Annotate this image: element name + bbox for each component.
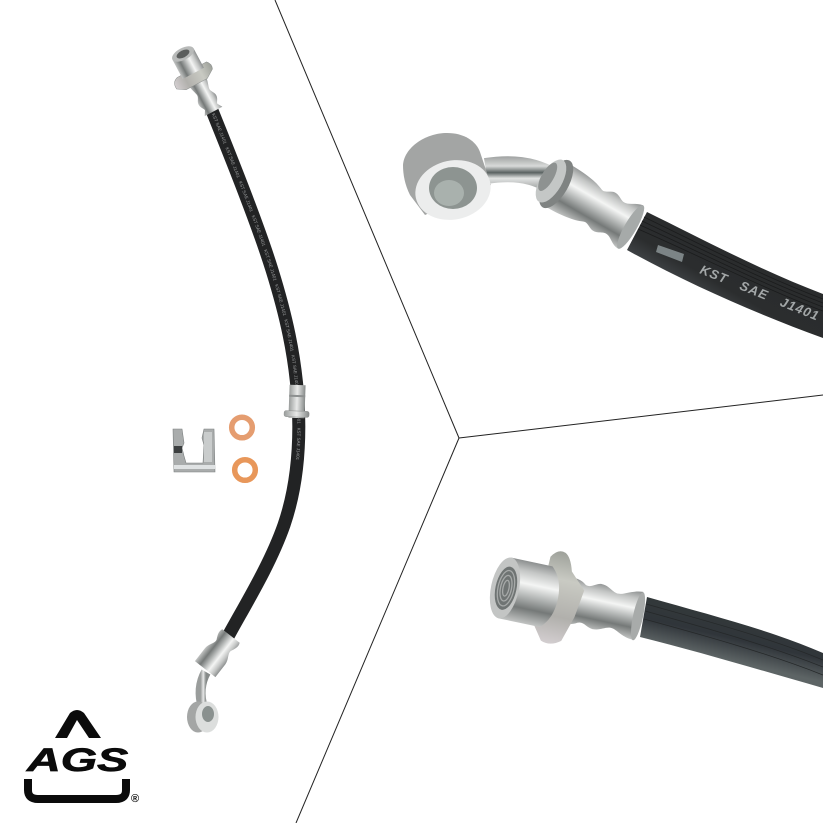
hose ribs [644,604,823,675]
logo top chevron [55,710,101,738]
divider lines [275,0,823,823]
opening [485,555,525,621]
hose body [211,108,299,640]
middle collar [284,385,310,418]
top fitting [161,39,231,122]
clip [173,429,215,472]
logo: AGS [26,710,139,805]
logo wordmark: AGS [26,743,129,778]
logo bottom bracket [28,779,126,799]
banjo stem [201,672,206,708]
hose printing: KST SAE J1401 KST SAE J1401 KST SAE J1401 KST SAE J1401 KST SAE J1401 KST SAE J1401 KST SAE J1401 KST SAE J1401 KST SAE J1401 KST SAE J1401 [212,113,300,460]
hose printing: KST SAE J1401 [698,262,822,324]
body [499,558,564,630]
detail: banjo end hose [403,133,823,338]
bottom fitting [195,628,241,677]
banjo ring [187,702,218,732]
hose ribs [638,217,823,311]
banjo stem [486,169,552,181]
crimp [549,574,643,640]
registered mark: ® [131,793,139,805]
long brake hose assembly [172,46,310,732]
hose marker [656,245,684,262]
rubber hose [640,597,823,688]
detail: threaded end hose [482,538,823,688]
rubber hose [627,212,823,338]
threaded fitting [482,538,653,662]
flange [531,549,591,649]
copper washer 2 [235,460,255,480]
copper washer 1 [232,417,252,438]
crimp [528,152,649,253]
banjo ring [403,133,496,227]
